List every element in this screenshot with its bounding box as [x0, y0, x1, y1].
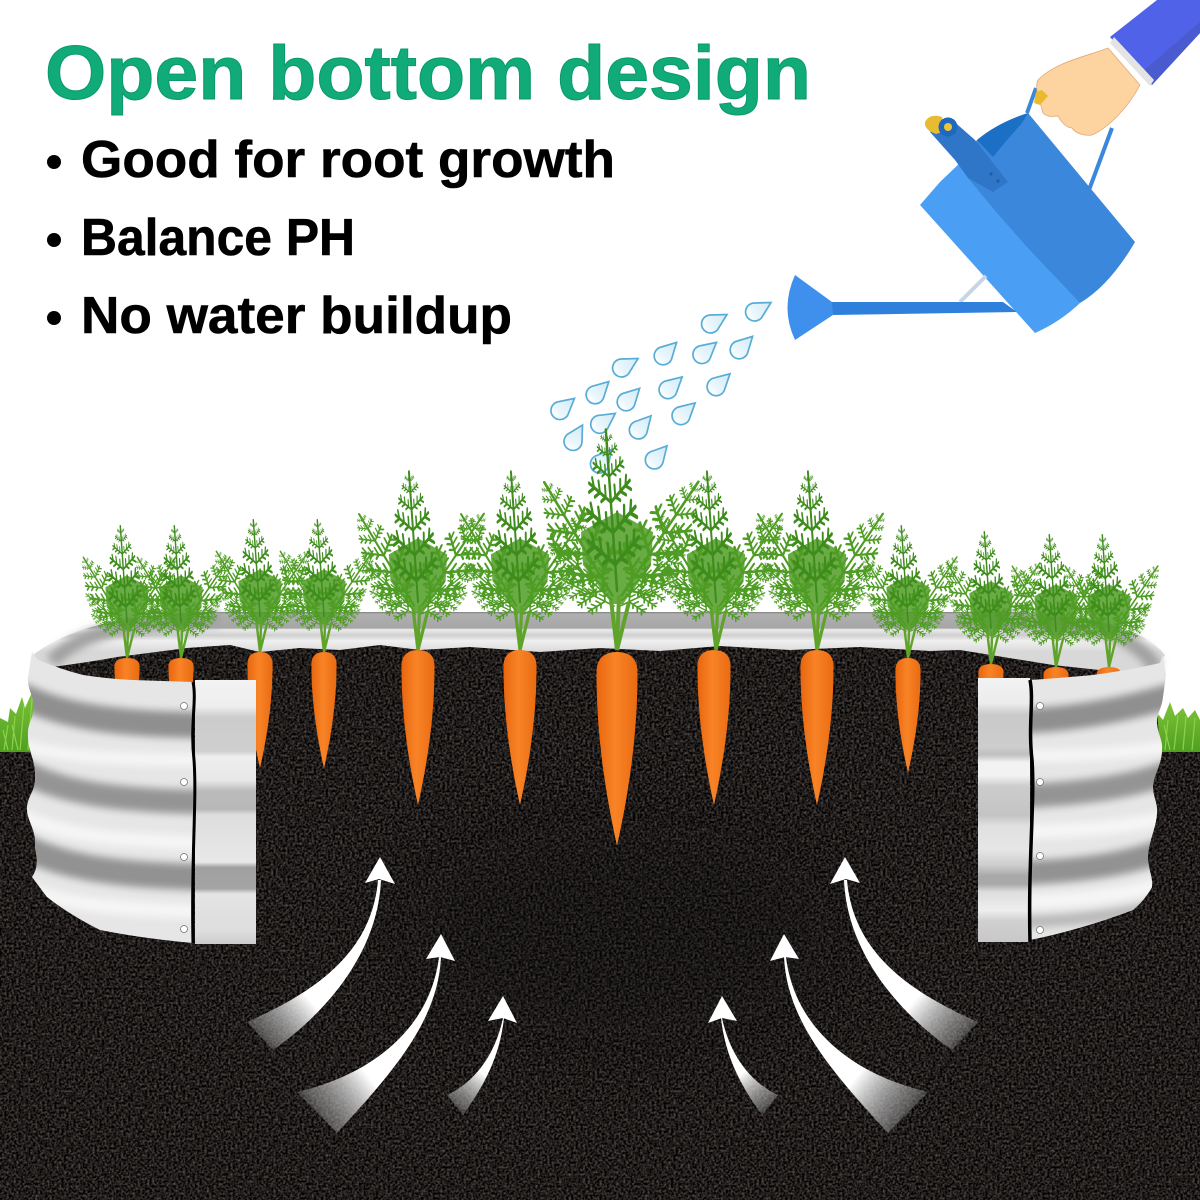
- left arrows: [247, 857, 517, 1133]
- arrow 5: [770, 934, 928, 1133]
- soil: [0, 645, 1200, 1200]
- curved corrugated section: [1030, 656, 1166, 940]
- left grass: [0, 690, 40, 752]
- bullet: good for root growth: Good for root growth: [81, 131, 615, 189]
- bullet: balance PH: Balance PH: [81, 209, 355, 267]
- arrow 3: [447, 996, 517, 1115]
- right bed wall: [978, 656, 1166, 942]
- spout: [830, 302, 1017, 315]
- flat end panel: [978, 678, 1030, 942]
- can front panel: [920, 160, 1080, 333]
- seam: [193, 682, 195, 943]
- raised bed back wall: [33, 612, 1165, 680]
- carrot foliage: [69, 429, 1172, 667]
- curved corrugated section: [26, 652, 194, 943]
- spout rose: [788, 275, 833, 340]
- can opening: [977, 113, 1028, 157]
- right grass: [1150, 702, 1200, 752]
- flat end panel: [195, 680, 256, 944]
- arrow 2: [297, 934, 455, 1133]
- arrows rising through soil: [247, 857, 978, 1133]
- bullet list: [47, 131, 615, 345]
- carrots: [114, 650, 1122, 846]
- seam: [1030, 680, 1033, 942]
- arrow 6: [708, 996, 778, 1115]
- top handle: [925, 116, 1008, 192]
- arrow 4: [830, 857, 978, 1050]
- rivets: [1036, 702, 1044, 934]
- can handle wire: [1027, 88, 1112, 190]
- grass: [0, 690, 1200, 752]
- rivets: [180, 702, 188, 932]
- right arrows: [708, 857, 978, 1133]
- arrow 1: [247, 857, 395, 1050]
- title: Open bottom design: [45, 31, 811, 116]
- water drops: [547, 295, 775, 477]
- icon: hand holding watering can: [788, 0, 1200, 340]
- hand: [1037, 48, 1140, 135]
- sleeve: [1110, 0, 1200, 86]
- spout strut: [960, 276, 986, 302]
- handle grip: [1034, 90, 1048, 105]
- bullet: no water buildup: No water buildup: [81, 287, 512, 345]
- left bed wall: [20, 640, 256, 950]
- can body: [950, 113, 1135, 303]
